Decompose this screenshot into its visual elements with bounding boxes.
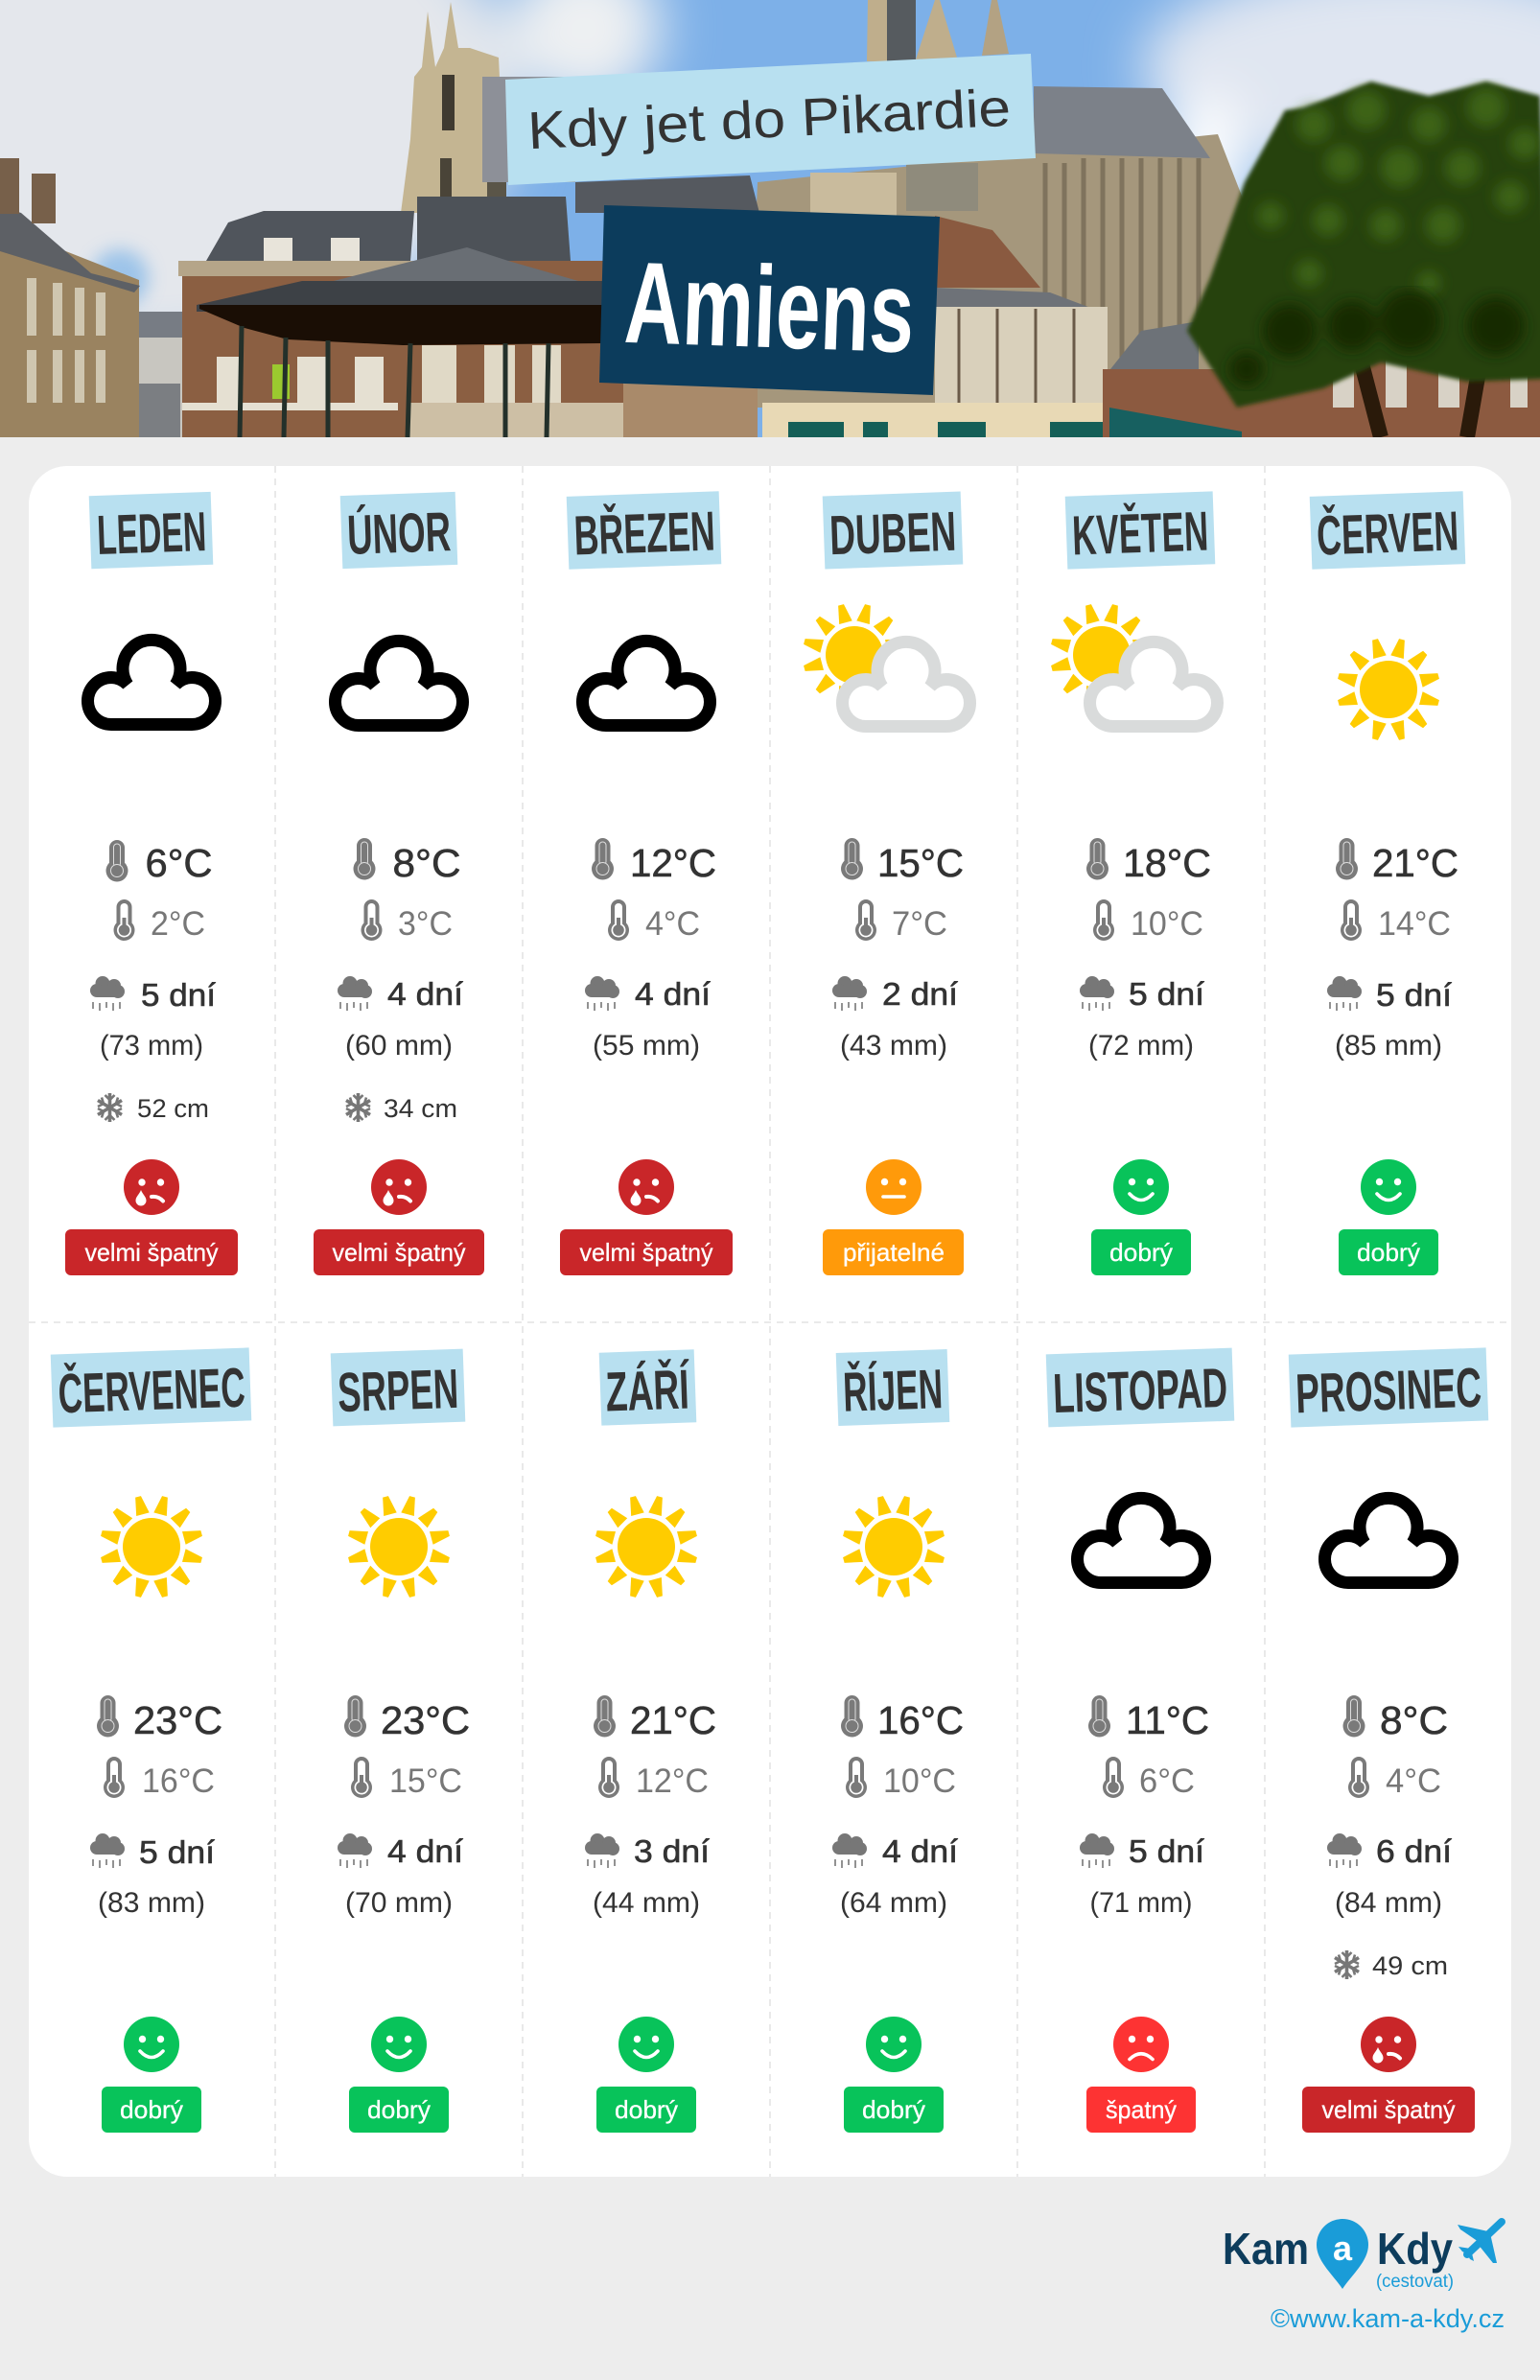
rating badge	[314, 1229, 484, 1275]
rain days	[1080, 1833, 1204, 1869]
rating badge	[1339, 1229, 1438, 1275]
low temperature: 4°C	[1386, 1762, 1441, 1800]
rain days: 6 dní	[1376, 1833, 1452, 1869]
mood icon: acceptable	[866, 1159, 922, 1215]
month column: Leden	[65, 492, 238, 1275]
high temperature: 15°C	[877, 841, 964, 885]
weather icon: cloud	[87, 640, 216, 725]
logo word: Kam: Kam	[1223, 2224, 1309, 2274]
rain days	[90, 976, 216, 1013]
precipitation: (71 mm)	[1089, 1887, 1193, 1919]
rain days	[832, 1833, 958, 1869]
high temperature: 23°C	[133, 1698, 222, 1742]
precipitation: (84 mm)	[1335, 1887, 1442, 1919]
mood icon: good	[1361, 1159, 1416, 1215]
month tag	[823, 492, 963, 569]
snow	[1335, 1950, 1448, 1980]
month column: Září	[585, 1349, 716, 2133]
month tag: ÚNOR	[346, 501, 452, 567]
mood icon: very bad	[618, 1159, 674, 1215]
snow	[346, 1093, 457, 1123]
high temperature	[97, 1695, 222, 1742]
month tag	[567, 491, 721, 570]
rain days: 3 dní	[634, 1833, 710, 1869]
rain days: 4 dní	[635, 976, 711, 1012]
rain days	[1327, 976, 1452, 1013]
title banner: Kdy jet do Pikardie: Kdy jet do Pikardie	[526, 78, 1012, 160]
weather icon: sun behind cloud	[803, 603, 970, 727]
rating badge: velmi špatný	[1321, 2095, 1456, 2124]
weather icon: sun	[100, 1495, 203, 1598]
month tag: BŘEZEN	[573, 500, 716, 568]
rating badge: přijatelné	[843, 1238, 945, 1267]
mood icon: good	[124, 2017, 179, 2072]
rating badge: špatný	[1106, 2095, 1177, 2124]
rain days	[585, 1833, 710, 1869]
month column: Duben	[803, 492, 970, 1275]
snow	[98, 1093, 209, 1123]
mood icon: good	[866, 2017, 922, 2072]
rain days: 2 dní	[882, 976, 958, 1012]
rain days	[338, 1833, 463, 1869]
month tag: LISTOPAD	[1052, 1357, 1228, 1425]
high temperature	[594, 1695, 716, 1742]
mood icon: very bad	[1361, 2017, 1416, 2072]
precipitation: (85 mm)	[1335, 1030, 1442, 1062]
rating badge: dobrý	[1357, 1238, 1420, 1267]
rain days	[1080, 976, 1204, 1012]
high temperature	[841, 1695, 964, 1742]
rating badge: dobrý	[120, 2095, 183, 2124]
logo: Kam a Kdy	[1223, 2219, 1505, 2333]
low temperature	[351, 1757, 462, 1800]
rain days	[90, 1833, 215, 1870]
rain days: 5 dní	[141, 977, 216, 1013]
low temperature: 3°C	[398, 905, 453, 943]
weather icon: sun	[842, 1495, 945, 1598]
rating badge: dobrý	[1109, 1238, 1173, 1267]
rating badge	[560, 1229, 733, 1275]
month column: Květen	[1050, 491, 1218, 1275]
city banner: Amiens	[599, 205, 940, 395]
mood icon: very bad	[371, 1159, 427, 1215]
precipitation: (55 mm)	[593, 1030, 700, 1062]
month tag	[1046, 1348, 1234, 1427]
month tag	[51, 1347, 251, 1428]
weather icon: cloud	[335, 641, 463, 725]
month tag: SRPEN	[337, 1358, 459, 1424]
high temperature: 8°C	[393, 841, 460, 885]
rain days: 4 dní	[882, 1833, 958, 1869]
high temperature	[1336, 838, 1458, 885]
rating badge	[1302, 2087, 1475, 2133]
rain days	[1327, 1833, 1452, 1869]
high temperature: 11°C	[1126, 1698, 1209, 1742]
icon: airplane	[1458, 2222, 1502, 2263]
mood icon: bad	[1113, 2017, 1169, 2072]
low temperature	[1348, 1757, 1441, 1800]
rating badge	[823, 1229, 964, 1275]
weather icon: sun behind cloud	[1050, 603, 1218, 727]
weather icon: cloud	[1077, 1498, 1205, 1582]
high temperature: 8°C	[1380, 1698, 1448, 1742]
precipitation: (60 mm)	[345, 1030, 453, 1062]
rating badge	[65, 1229, 238, 1275]
rain days: 5 dní	[1129, 976, 1204, 1012]
high temperature	[344, 1695, 470, 1742]
low temperature	[1341, 899, 1451, 943]
mood icon: good	[1113, 1159, 1169, 1215]
low temperature	[1093, 899, 1203, 943]
low temperature: 10°C	[883, 1762, 956, 1800]
rating badge: dobrý	[615, 2095, 678, 2124]
rain days: 5 dní	[1129, 1833, 1204, 1869]
high temperature	[592, 838, 716, 885]
weather icon: cloud	[1324, 1498, 1453, 1582]
high temperature: 21°C	[630, 1698, 716, 1742]
low temperature	[855, 899, 947, 943]
rating badge: dobrý	[367, 2095, 431, 2124]
month tag: DUBEN	[828, 501, 957, 567]
month tag	[331, 1349, 465, 1426]
snow: 52 cm	[137, 1094, 209, 1123]
weather icon: cloud	[582, 641, 711, 725]
precipitation: (70 mm)	[345, 1887, 453, 1919]
city banner: Amiens: Amiens	[622, 237, 917, 377]
icon: map pin with a: a	[1333, 2228, 1353, 2268]
month tag	[836, 1349, 949, 1426]
high temperature: 12°C	[630, 841, 716, 885]
month column: Červen	[1310, 491, 1465, 1275]
low temperature	[104, 1757, 215, 1800]
mood icon: good	[618, 2017, 674, 2072]
header photo: Amiens cathedral and square	[0, 0, 1540, 437]
low temperature: 15°C	[389, 1762, 462, 1800]
rain days	[585, 976, 711, 1012]
snow: 34 cm	[384, 1094, 457, 1123]
mood icon: good	[371, 2017, 427, 2072]
month tag: ŘÍJEN	[842, 1358, 944, 1424]
high temperature: 6°C	[146, 841, 213, 885]
rating badge: dobrý	[862, 2095, 925, 2124]
low temperature	[113, 899, 205, 943]
logo word: Kdy: Kdy	[1377, 2224, 1453, 2274]
weather icon: sun	[1337, 638, 1440, 741]
high temperature	[1086, 838, 1211, 885]
month column: Prosinec	[1289, 1347, 1488, 2133]
rain days: 5 dní	[139, 1834, 215, 1870]
month tag: ZÁŘÍ	[605, 1358, 691, 1423]
rating badge	[1086, 2087, 1196, 2133]
low temperature: 7°C	[892, 905, 947, 943]
rain days	[338, 976, 463, 1012]
low temperature: 6°C	[1139, 1762, 1195, 1800]
low temperature	[1103, 1757, 1195, 1800]
website link: ©www.kam-a-kdy.cz	[1271, 2304, 1505, 2333]
precipitation: (72 mm)	[1088, 1030, 1194, 1062]
precipitation: (44 mm)	[593, 1887, 700, 1919]
low temperature: 2°C	[151, 905, 205, 943]
high temperature: 16°C	[877, 1698, 964, 1742]
high temperature	[1088, 1695, 1209, 1742]
rating badge: velmi špatný	[332, 1238, 466, 1267]
month column: Březen	[560, 491, 733, 1275]
month tag	[1310, 491, 1465, 570]
low temperature: 10°C	[1131, 905, 1203, 943]
month column: Srpen	[331, 1349, 470, 2133]
month tag: LEDEN	[96, 501, 207, 567]
high temperature: 21°C	[1372, 841, 1458, 885]
month column: Říjen	[832, 1349, 964, 2133]
high temperature: 18°C	[1123, 841, 1211, 885]
rating badge	[1091, 1229, 1191, 1275]
rating badge	[349, 2087, 449, 2133]
month tag	[340, 492, 457, 569]
panel: monthly weather card	[29, 466, 1511, 2177]
low temperature	[598, 1757, 709, 1800]
high temperature	[105, 840, 213, 885]
low temperature: 4°C	[645, 905, 700, 943]
rating badge: velmi špatný	[579, 1238, 713, 1267]
rain days	[832, 976, 958, 1012]
month column: Červenec	[51, 1347, 251, 2133]
precipitation: (73 mm)	[100, 1030, 203, 1062]
low temperature	[608, 899, 700, 943]
month tag	[599, 1349, 696, 1426]
month tag	[1065, 491, 1215, 570]
precipitation: (83 mm)	[98, 1887, 205, 1919]
month tag	[89, 492, 213, 569]
weather icon: sun	[595, 1495, 698, 1598]
rating badge: velmi špatný	[84, 1238, 219, 1267]
logo subtitle: (cestovat)	[1376, 2272, 1454, 2292]
month column: Únor	[314, 492, 484, 1275]
high temperature	[1342, 1695, 1448, 1742]
low temperature: 12°C	[636, 1762, 709, 1800]
high temperature: 23°C	[381, 1698, 470, 1742]
rain days: 5 dní	[1376, 977, 1452, 1013]
high temperature	[841, 838, 964, 885]
rain days: 4 dní	[387, 1833, 463, 1869]
high temperature	[353, 838, 460, 885]
month column: Listopad	[1046, 1348, 1234, 2133]
precipitation: (43 mm)	[840, 1030, 947, 1062]
rating badge	[596, 2087, 696, 2133]
low temperature: 14°C	[1378, 905, 1451, 943]
low temperature: 16°C	[142, 1762, 215, 1800]
icon: map pin with a	[1317, 2219, 1368, 2289]
low temperature	[846, 1757, 956, 1800]
precipitation: (64 mm)	[840, 1887, 947, 1919]
low temperature	[361, 899, 453, 943]
mood icon: very bad	[124, 1159, 179, 1215]
rating badge	[102, 2087, 201, 2133]
month tag: ČERVENEC	[58, 1357, 246, 1425]
rating badge	[844, 2087, 944, 2133]
title banner: Kdy jet do Pikardie	[505, 54, 1036, 185]
month tag: KVĚTEN	[1071, 501, 1209, 567]
rain days: 4 dní	[387, 976, 463, 1012]
snow: 49 cm	[1372, 1951, 1448, 1980]
weather icon: sun	[347, 1495, 451, 1598]
